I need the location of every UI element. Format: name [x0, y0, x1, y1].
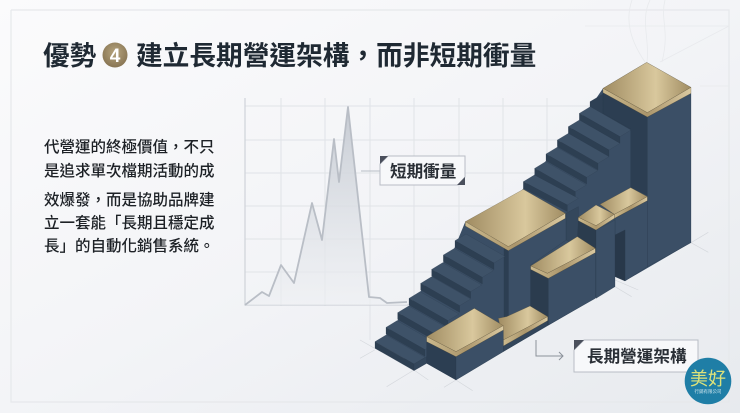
callout: long-term structure: 長期營運架構 [587, 347, 687, 366]
illustration: isometric staircase architecture [360, 62, 708, 391]
front block [427, 308, 503, 380]
middle blocks [503, 220, 615, 352]
wall faces [504, 93, 691, 319]
callout: long-term structure [574, 340, 698, 372]
callout: short-term spike [361, 156, 465, 185]
body text: 長」的自動化銷售系統。 [44, 236, 215, 255]
icon: number badge 4 [102, 42, 128, 68]
body text: 立一套能「長期且穩定成 [44, 213, 215, 232]
body text: 是追求單次檔期活動的成 [44, 162, 215, 180]
body text [44, 138, 215, 255]
callout: short-term spike: 短期衝量 [390, 162, 456, 181]
title: 建立長期營運架構，而非短期衝量 [136, 41, 536, 71]
logo badge: 行銷有限公司 [694, 388, 722, 395]
title: 優勢 [43, 41, 97, 71]
body text: 代營運的終極價值，不只 [44, 138, 215, 156]
chart: short-term spike line [245, 98, 660, 340]
base silhouette [386, 62, 691, 380]
upper stairs [523, 94, 631, 212]
lower stairs [375, 234, 505, 371]
arrow: to long-term structure label [536, 340, 563, 360]
icon: number badge 4: 4 [110, 46, 121, 67]
logo badge [685, 358, 731, 404]
gold slabs [465, 62, 691, 346]
body text: 效爆發，而是協助品牌建 [44, 191, 215, 209]
logo badge: 美好 [690, 369, 726, 389]
